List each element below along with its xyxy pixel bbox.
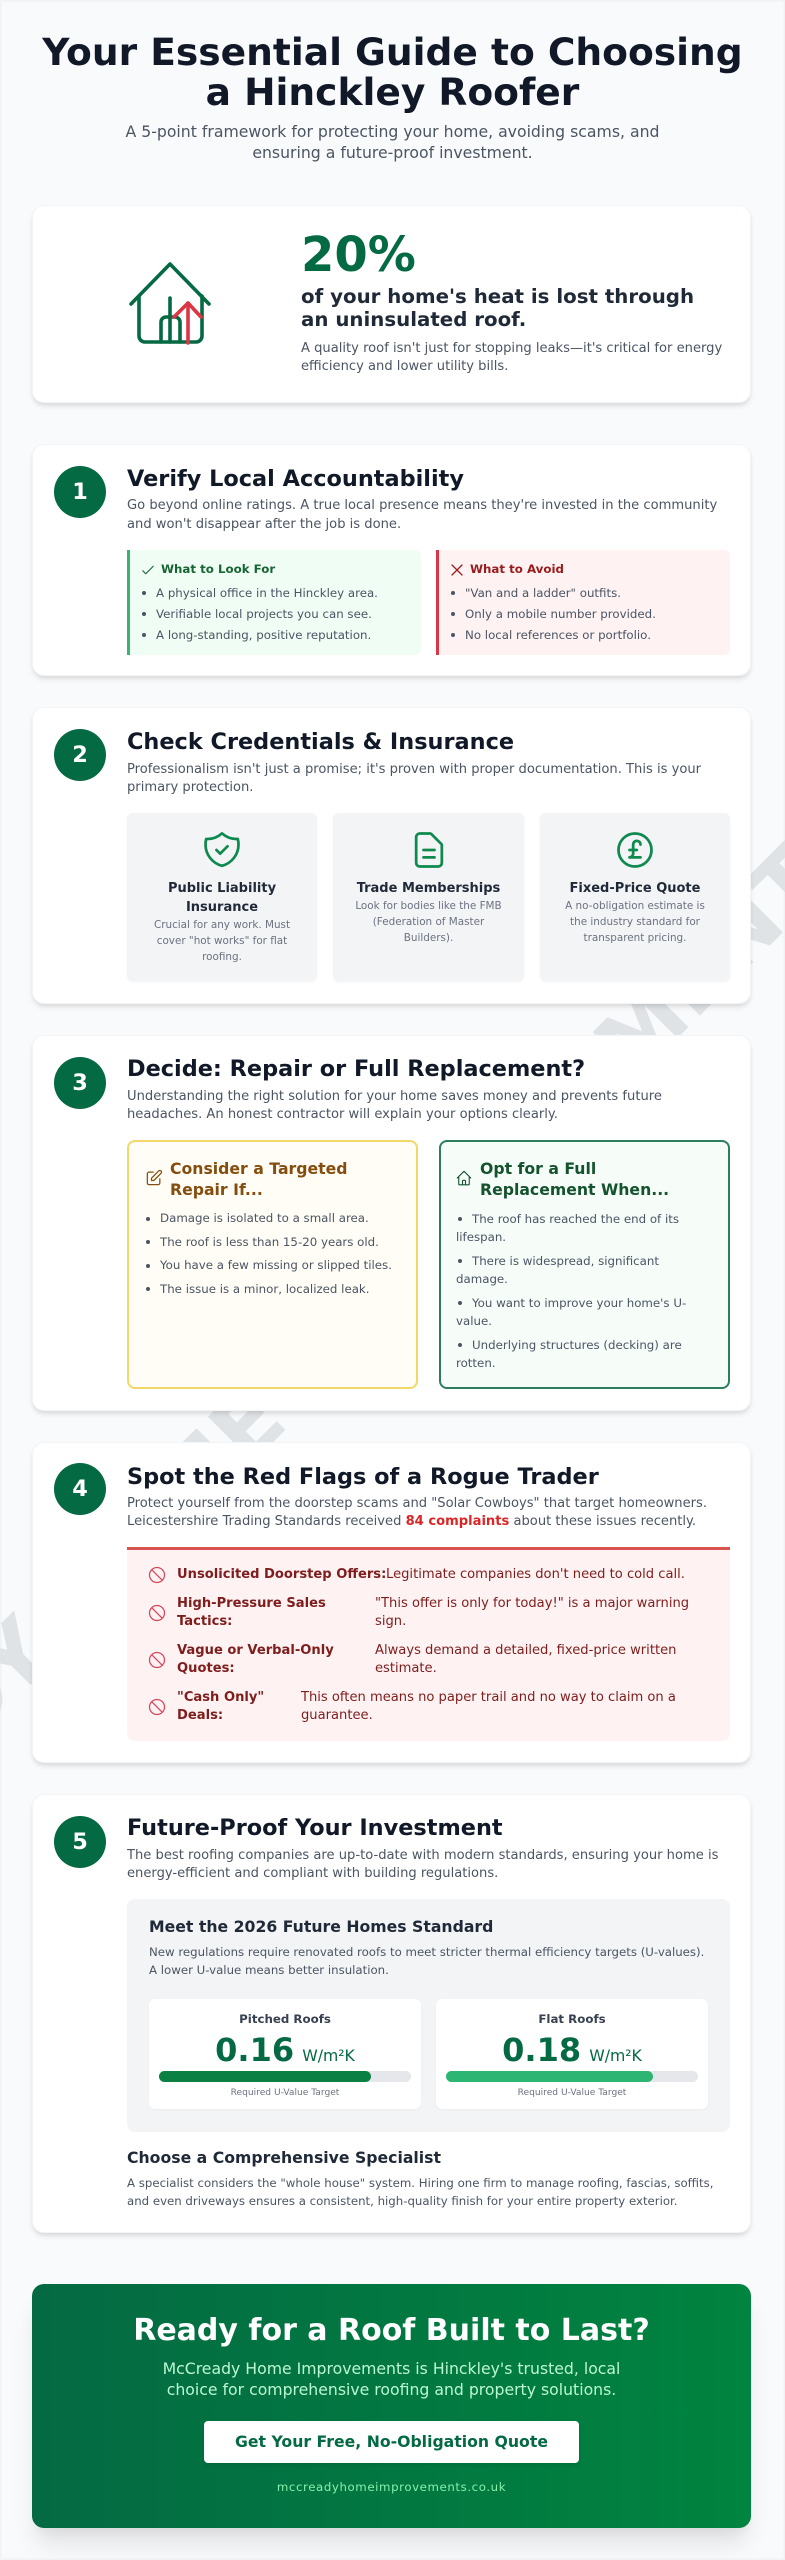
panel: fixed-price quote <box>540 813 730 981</box>
heading: Future-Proof Your Investment <box>127 1815 503 1841</box>
icon: pound <box>617 832 653 868</box>
bullet list <box>451 586 656 642</box>
card title: Public Liability <box>168 881 276 896</box>
panel: pitched roofs <box>149 1999 421 2109</box>
panel: step 4 <box>32 1442 751 1763</box>
card text: roofing. <box>202 951 242 963</box>
box heading: Replacement When... <box>480 1180 669 1199</box>
panel: trade memberships <box>333 813 524 981</box>
panel: what to look for: A physical office in the Hinckley area. <box>156 586 378 600</box>
step number 3 <box>54 1057 106 1109</box>
icon: house with heat arrow <box>129 262 211 345</box>
text block <box>127 762 701 795</box>
panel: what to look for <box>127 550 421 654</box>
step number 1 <box>54 466 106 518</box>
cta text <box>32 2358 751 2400</box>
cta text: McCready Home Improvements is Hinckley's trusted, local <box>163 2358 620 2378</box>
panel: targeted repair: Damage is isolated to a small area. <box>160 1211 369 1225</box>
text block <box>127 1496 707 1529</box>
icon: ban <box>148 1698 166 1716</box>
panel: step 2 <box>32 707 751 1004</box>
panel: what to avoid: Only a mobile number provided. <box>465 606 656 620</box>
box heading <box>480 1159 669 1199</box>
panel: call to action <box>32 2284 751 2528</box>
specialist text: and even driveways ensures a consistent, high-quality finish for your entire property exterior. <box>127 2194 678 2208</box>
card text <box>565 900 705 944</box>
flag label <box>177 1596 326 1629</box>
progress bar <box>446 2071 698 2082</box>
flag label: Tactics: <box>177 1614 232 1629</box>
text block <box>127 498 717 532</box>
text block: and won't disappear after the job is done. <box>127 517 401 532</box>
flag text <box>375 1596 689 1629</box>
stat description: efficiency and lower utility bills. <box>301 359 508 374</box>
progress bar <box>159 2071 411 2082</box>
flag text: sign. <box>375 1614 406 1629</box>
panel: public liability insurance <box>127 813 317 981</box>
text block: Go beyond online ratings. A true local presence means they're invested in the community <box>127 498 717 513</box>
card text: the industry standard for <box>570 916 700 928</box>
card text: (Federation of Master <box>373 916 484 928</box>
flag text <box>300 1690 676 1723</box>
step number 4: 4 <box>72 1476 88 1502</box>
panel: step 5 <box>32 1794 751 2233</box>
panel: full replacement: The roof has reached the end of its <box>472 1212 679 1226</box>
flag label: High-Pressure Sales <box>177 1596 326 1611</box>
standard heading: Meet the 2026 Future Homes Standard <box>149 1917 493 1936</box>
step number 1: 1 <box>72 479 88 505</box>
heading: Check Credentials & Insurance <box>127 729 514 755</box>
button: Get Your Free, No-Obligation Quote <box>235 2432 548 2451</box>
box heading: What to Look For <box>161 562 275 576</box>
card title <box>168 881 276 915</box>
button <box>204 2421 579 2463</box>
flag text: "This offer is only for today!" is a major warning <box>375 1596 689 1611</box>
stat headline: of your home's heat is lost through <box>301 284 694 308</box>
flag label <box>177 1690 264 1723</box>
step number 2 <box>54 729 106 781</box>
box heading: What to Avoid <box>470 562 564 576</box>
card text <box>154 919 290 963</box>
card text: transparent pricing. <box>584 932 686 944</box>
big number: 20% <box>301 227 416 283</box>
flag text <box>375 1643 676 1676</box>
text block: primary protection. <box>127 780 253 795</box>
value: 0.18 W/m²K <box>502 2031 642 2069</box>
panel: what to avoid: "Van and a ladder" outfits. <box>465 586 621 600</box>
panel: full replacement: lifespan. <box>456 1230 506 1244</box>
subtitle: A 5-point framework for protecting your home, avoiding scams, and <box>126 122 659 140</box>
panel: what to look for: A long-standing, positive reputation. <box>156 628 371 642</box>
step number 2: 2 <box>72 742 88 768</box>
icon: ban <box>148 1566 166 1584</box>
icon: pencil <box>146 1170 162 1186</box>
panel: what to avoid <box>436 550 730 654</box>
flag label: Quotes: <box>177 1661 235 1676</box>
panel: targeted repair: You have a few missing or slipped tiles. <box>160 1258 392 1272</box>
text block: Protect yourself from the doorstep scams and "Solar Cowboys" that target homeowners. <box>127 1496 707 1511</box>
flag text: Legitimate companies don't need to cold call. <box>386 1567 685 1582</box>
panel: hero statistic <box>32 205 751 403</box>
stat headline <box>301 284 694 331</box>
caption: Required U-Value Target <box>518 2088 626 2098</box>
panel: future homes standard <box>127 1899 730 2132</box>
title <box>42 30 743 114</box>
standard text: A lower U-value means better insulation. <box>149 1963 389 1977</box>
bullet list <box>146 1211 392 1296</box>
specialist text <box>127 2174 714 2210</box>
panel: flat roofs <box>436 1999 708 2109</box>
stat description: A quality roof isn't just for stopping leaks—it's critical for energy <box>301 341 722 356</box>
card text: Look for bodies like the FMB <box>355 900 502 912</box>
specialist heading: Choose a Comprehensive Specialist <box>127 2148 441 2167</box>
stat description <box>301 341 722 374</box>
flag label <box>177 1643 334 1676</box>
flag text: guarantee. <box>301 1708 373 1723</box>
bullet list <box>142 586 378 642</box>
step number 5: 5 <box>72 1829 88 1855</box>
cta text: choice for comprehensive roofing and property solutions. <box>167 2380 616 2398</box>
card text: cover "hot works" for flat <box>157 935 287 947</box>
panel: what to look for: Verifiable local projects you can see. <box>156 606 372 620</box>
text block <box>126 1848 718 1881</box>
icon: cross <box>451 564 463 576</box>
card title: Trade Memberships <box>357 881 500 896</box>
icon: ban <box>148 1652 166 1668</box>
panel: full replacement: Underlying structures (decking) are <box>472 1338 682 1352</box>
panel: full replacement: damage. <box>456 1272 508 1286</box>
panel: step 1 <box>32 444 751 676</box>
standard text: New regulations require renovated roofs to meet stricter thermal efficiency targets (U-values). <box>149 1944 704 1958</box>
label: Pitched Roofs <box>239 2012 331 2026</box>
panel: targeted repair <box>127 1140 418 1389</box>
panel: full replacement <box>439 1140 730 1389</box>
panel: step 3 <box>32 1035 751 1411</box>
icon: shield <box>204 832 240 868</box>
step number 4 <box>54 1463 106 1515</box>
panel: full replacement: value. <box>456 1314 492 1328</box>
specialist text: A specialist considers the "whole house" system. Hiring one firm to manage roofing, fascias, soffits, <box>127 2176 714 2190</box>
card text: Builders). <box>404 932 453 944</box>
panel: red flags <box>127 1547 730 1741</box>
card text: Crucial for any work. Must <box>154 919 290 931</box>
flag text: estimate. <box>375 1661 437 1676</box>
panel: full replacement: You want to improve your home's U- <box>472 1296 686 1310</box>
text block: Understanding the right solution for your home saves money and prevents future <box>127 1089 662 1104</box>
flag label: Deals: <box>177 1708 223 1723</box>
flag label: "Cash Only" <box>177 1690 264 1705</box>
panel: full replacement: rotten. <box>456 1356 496 1370</box>
label: Flat Roofs <box>538 2012 606 2026</box>
icon: document <box>414 832 444 868</box>
card title: Insurance <box>186 900 258 915</box>
flag label: Unsolicited Doorstep Offers: <box>177 1567 386 1582</box>
box heading: Opt for a Full <box>480 1159 596 1178</box>
caption: Required U-Value Target <box>231 2088 339 2098</box>
website: mccreadyhomeimprovements.co.uk <box>277 2480 506 2494</box>
card text <box>355 900 502 944</box>
cta heading: Ready for a Roof Built to Last? <box>133 2313 650 2348</box>
stat headline: an uninsulated roof. <box>301 308 526 331</box>
card text: A no-obligation estimate is <box>565 900 705 912</box>
bullet list <box>456 1212 686 1370</box>
box heading: Consider a Targeted <box>170 1159 348 1178</box>
heading: Spot the Red Flags of a Rogue Trader <box>127 1464 599 1490</box>
flag label: Vague or Verbal-Only <box>177 1643 334 1658</box>
heading: Decide: Repair or Full Replacement? <box>127 1056 585 1082</box>
text block <box>127 1089 662 1122</box>
card title: Fixed-Price Quote <box>570 881 700 896</box>
panel: targeted repair: The roof is less than 15-20 years old. <box>160 1234 379 1248</box>
box heading <box>170 1159 348 1199</box>
panel: targeted repair: The issue is a minor, localized leak. <box>160 1282 370 1296</box>
icon: check <box>142 566 154 574</box>
text block: Professionalism isn't just a promise; it's proven with proper documentation. This is your <box>127 762 701 777</box>
text block: energy-efficient and compliant with building regulations. <box>127 1866 498 1881</box>
step number 5 <box>54 1816 106 1868</box>
standard text <box>149 1944 704 1977</box>
text block: headaches. An honest contractor will explain your options clearly. <box>127 1107 558 1122</box>
panel: full replacement: There is widespread, significant <box>472 1254 659 1268</box>
subtitle: ensuring a future-proof investment. <box>252 142 533 162</box>
flag text: Always demand a detailed, fixed-price written <box>375 1643 676 1658</box>
text block: Leicestershire Trading Standards received 84 complaints about these issues recently. <box>127 1514 696 1529</box>
icon: ban <box>148 1604 166 1622</box>
title: Your Essential Guide to Choosing <box>42 30 743 74</box>
title: a Hinckley Roofer <box>206 70 579 114</box>
icon: home <box>456 1170 472 1186</box>
step number 3: 3 <box>72 1070 88 1096</box>
panel: what to avoid: No local references or portfolio. <box>465 628 651 642</box>
heading: Verify Local Accountability <box>127 466 464 492</box>
box heading: Repair If... <box>170 1180 263 1199</box>
text block: The best roofing companies are up-to-date with modern standards, ensuring your home is <box>127 1848 718 1863</box>
flag text: This often means no paper trail and no way to claim on a <box>301 1690 676 1705</box>
subtitle <box>126 122 659 162</box>
value: 0.16 W/m²K <box>215 2031 355 2069</box>
